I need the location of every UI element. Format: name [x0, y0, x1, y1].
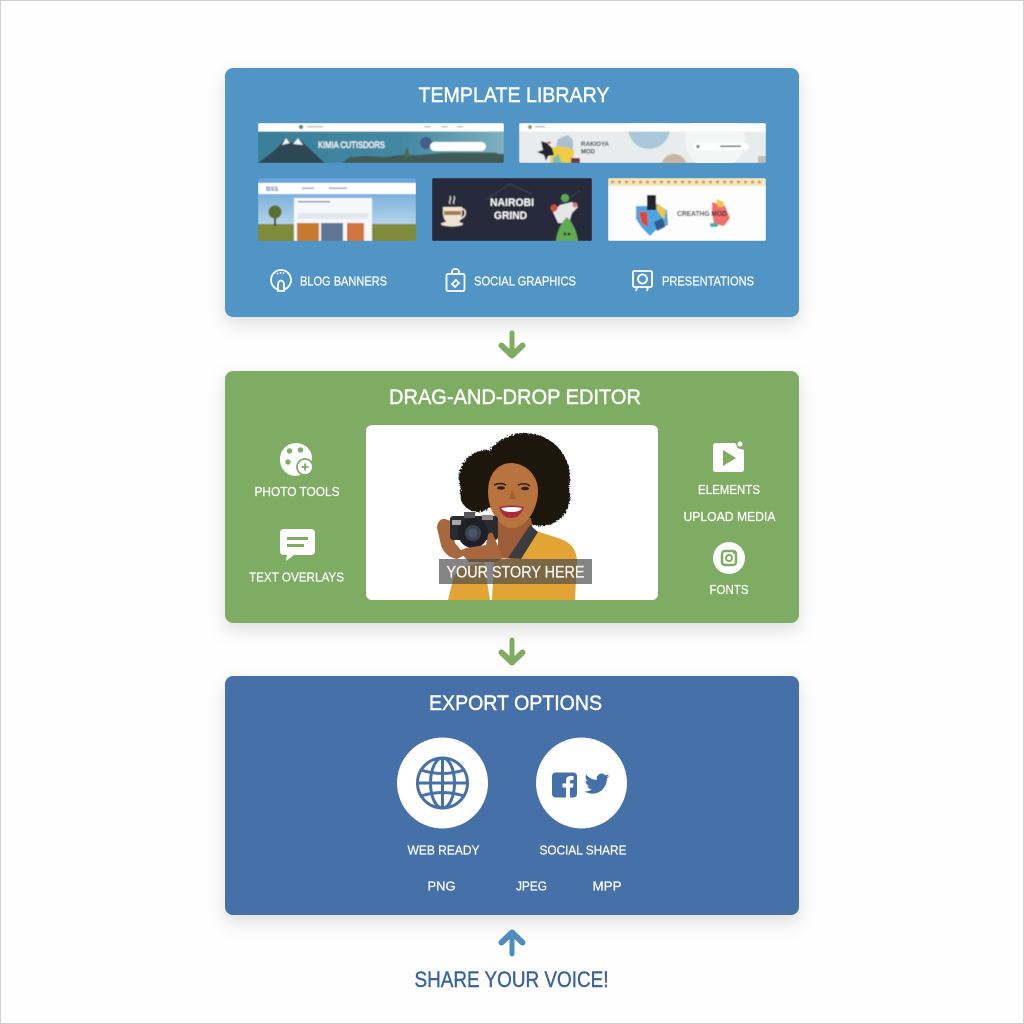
icon: speech bubble — [280, 529, 315, 561]
sweater — [448, 531, 577, 600]
thumbnail: Nairobi Grind — [432, 178, 592, 241]
hair — [459, 433, 570, 526]
thumbnail: landscape website — [258, 178, 416, 241]
icon: palette — [271, 270, 291, 291]
thumbnail: Rakioya mod banner — [519, 123, 766, 163]
thumbnail: Creating mod: CREATHG MOD — [677, 211, 727, 218]
thumbnail: Creating mod — [608, 178, 766, 241]
thumbnail: landscape website: BSS — [266, 187, 278, 193]
panel: drag-and-drop editor — [225, 371, 799, 623]
caption bar: your story here: YOUR STORY HERE — [446, 562, 584, 582]
thumbnail: Rakioya mod banner: MOD — [581, 150, 596, 156]
icon: palette — [280, 443, 313, 476]
heading: template library: TEMPLATE LIBRARY — [418, 84, 610, 107]
icon: globe — [397, 738, 488, 828]
icon: camera badge — [713, 542, 745, 574]
item: social graphics — [446, 269, 576, 291]
face — [488, 463, 538, 528]
thumbnail: Rakioya mod banner: RAKIOYA — [581, 142, 610, 148]
tool: elements — [698, 442, 760, 497]
thumbnail: Kenya outdoors banner — [258, 123, 504, 163]
item: blog banners — [271, 270, 387, 291]
tool: fonts — [710, 542, 749, 597]
tool: text overlays: TEXT OVERLAYS — [249, 570, 344, 584]
arrow: up to call to action — [502, 932, 522, 954]
arrow: library to editor — [502, 333, 522, 356]
item: blog banners: BLOG BANNERS — [300, 274, 387, 288]
label: web ready: WEB READY — [408, 842, 480, 858]
call to action: SHARE YOUR VOICE! — [414, 967, 608, 992]
label: png: PNG — [428, 878, 456, 894]
heading: export options: EXPORT OPTIONS — [429, 692, 602, 715]
heading: drag-and-drop editor: DRAG-AND-DROP EDITOR — [389, 386, 641, 409]
tool: photo tools — [254, 443, 340, 499]
panel: template library — [225, 68, 799, 317]
right hand — [459, 533, 503, 562]
label: jpeg: JPEG — [516, 878, 547, 894]
icon: tag bag — [446, 269, 464, 291]
label: mpp: MPP — [592, 878, 622, 894]
icon: play document — [713, 442, 744, 472]
thumbnail: Kenya outdoors banner: KIMIA CUTISDORS — [318, 140, 385, 150]
camera — [450, 512, 498, 548]
tool: fonts: FONTS — [710, 582, 749, 597]
tool: elements: ELEMENTS — [698, 482, 760, 497]
item: presentations — [633, 271, 754, 291]
arrow: editor to export — [502, 640, 522, 662]
item: presentations: PRESENTATIONS — [662, 274, 754, 288]
tool: photo tools: PHOTO TOOLS — [254, 484, 340, 499]
icon: social logos — [536, 738, 627, 828]
item: social graphics: SOCIAL GRAPHICS — [474, 274, 576, 288]
caption bar: your story here — [439, 559, 592, 584]
left hand — [437, 519, 465, 559]
icon: presentation screen — [633, 271, 652, 291]
tool: text overlays — [249, 529, 344, 584]
panel: export options — [225, 676, 799, 915]
canvas: portrait photo — [366, 425, 658, 600]
label: social share: SOCIAL SHARE — [540, 842, 627, 858]
thumbnail: Nairobi Grind: GRIND — [494, 210, 527, 222]
neck — [498, 518, 533, 559]
label: upload media: UPLOAD MEDIA — [684, 509, 776, 524]
thumbnail: Nairobi Grind: NAIROBI — [490, 197, 534, 209]
strap — [508, 525, 538, 559]
